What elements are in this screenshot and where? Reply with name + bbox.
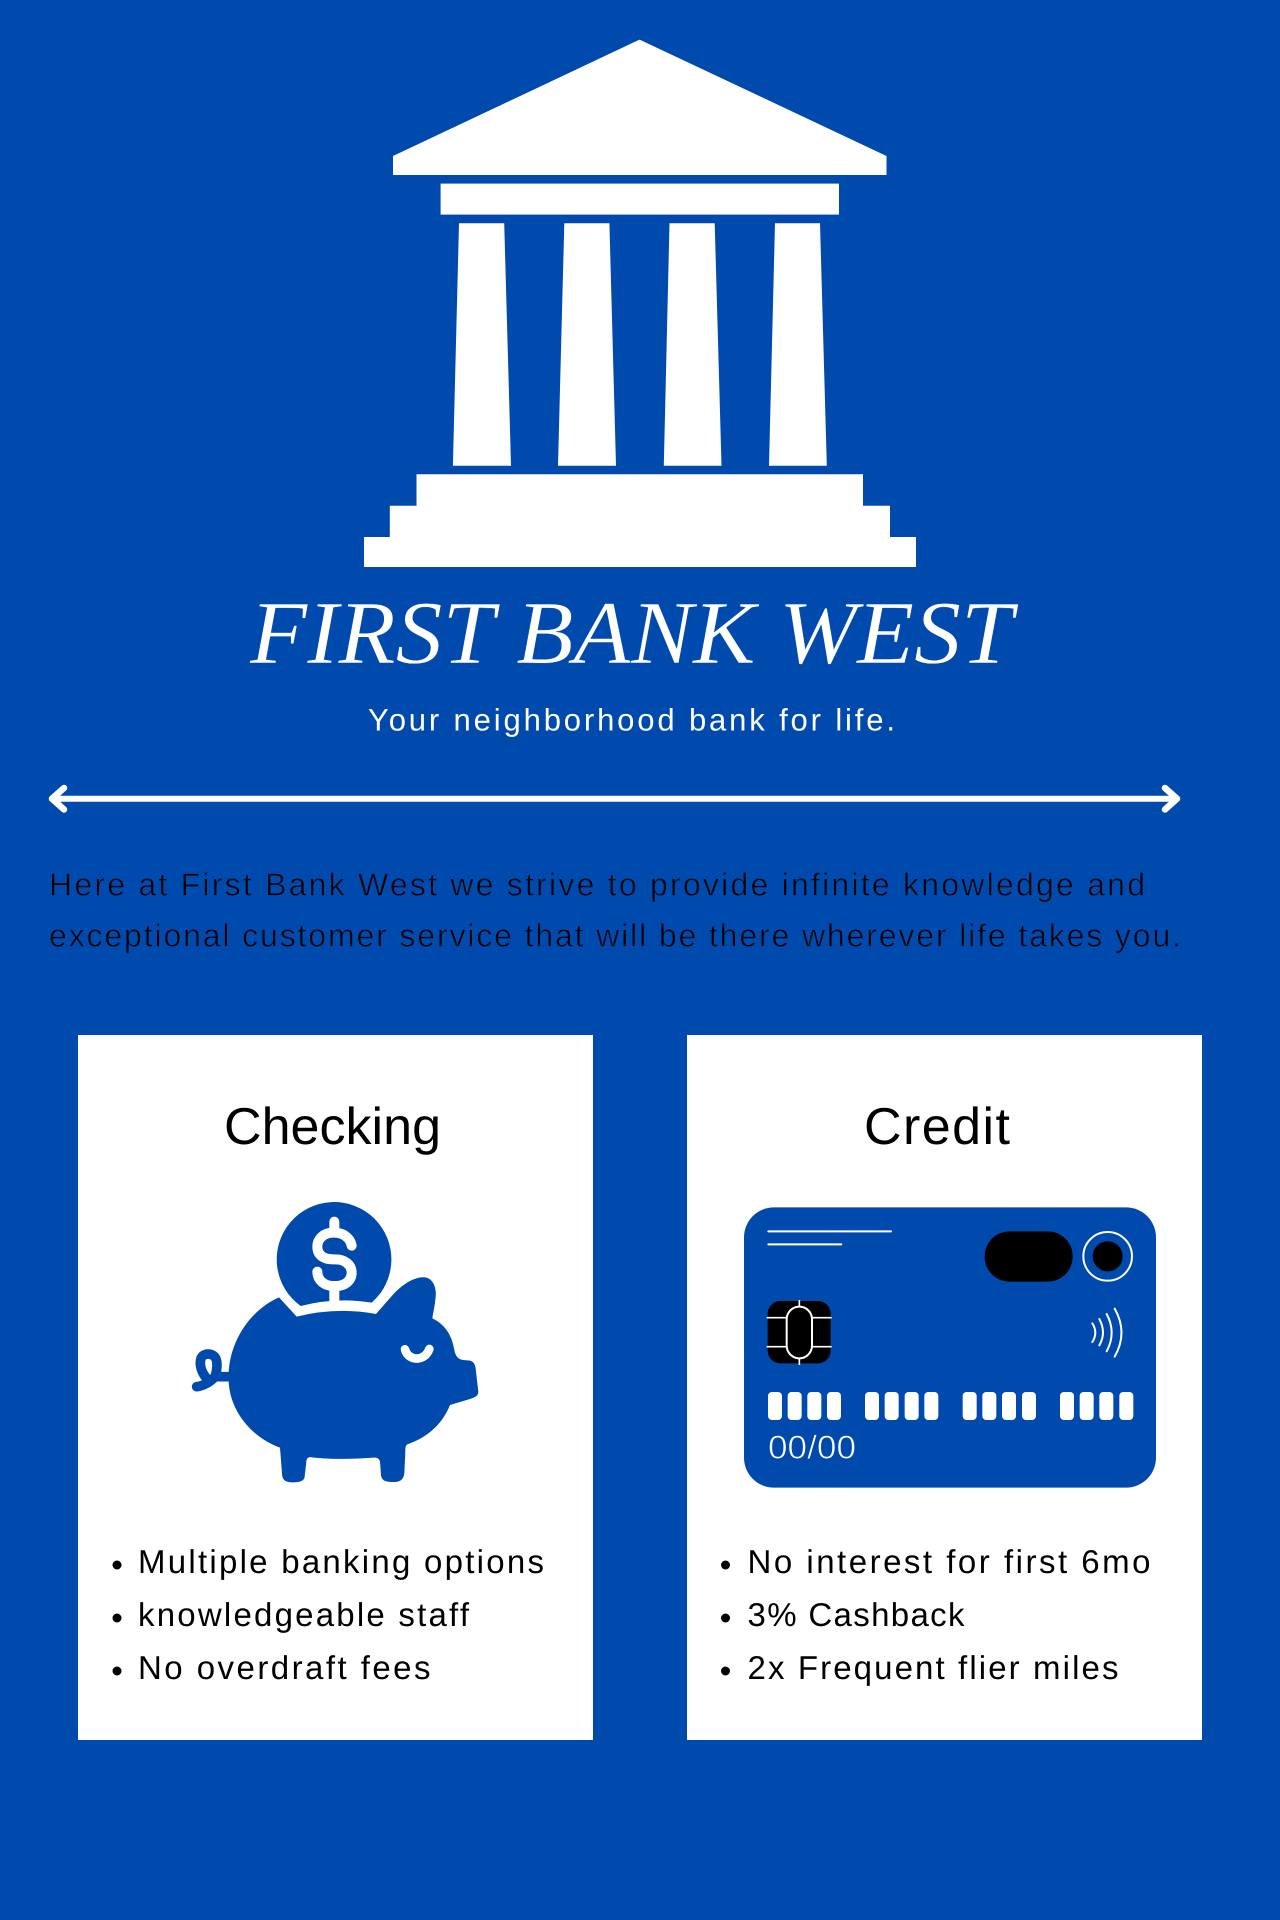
heading: credit: Credit (864, 1098, 1011, 1156)
list: credit features: 2x Frequent flier miles (748, 1649, 1118, 1686)
panel: checking (78, 1035, 593, 1740)
icon: credit card (744, 1207, 1156, 1488)
list: credit features: No interest for first 6mo (748, 1543, 1150, 1580)
arrow: double-headed divider (52, 788, 1177, 810)
list: credit features (721, 1543, 1150, 1686)
intro text: Here at First Bank West we strive to provide infinite knowledge and (49, 867, 1145, 903)
intro text: exceptional customer service that will be there wherever life takes you. (49, 918, 1181, 954)
tagline: Your neighborhood bank for life. (368, 703, 895, 738)
list: checking features: Multiple banking options (138, 1543, 544, 1580)
list: checking features: No overdraft fees (138, 1649, 430, 1686)
title: FIRST BANK WEST (249, 584, 1019, 683)
icon: credit card: 00/00 (768, 1429, 856, 1466)
icon: piggy bank with dollar coin (197, 1202, 478, 1482)
list: credit features: 3% Cashback (748, 1596, 965, 1633)
heading: checking: Checking (224, 1098, 441, 1156)
panel: credit (687, 1035, 1202, 1740)
list: checking features: knowledgeable staff (138, 1596, 470, 1633)
icon: bank building (364, 40, 916, 567)
intro text (49, 867, 1181, 954)
list: checking features (112, 1543, 544, 1686)
